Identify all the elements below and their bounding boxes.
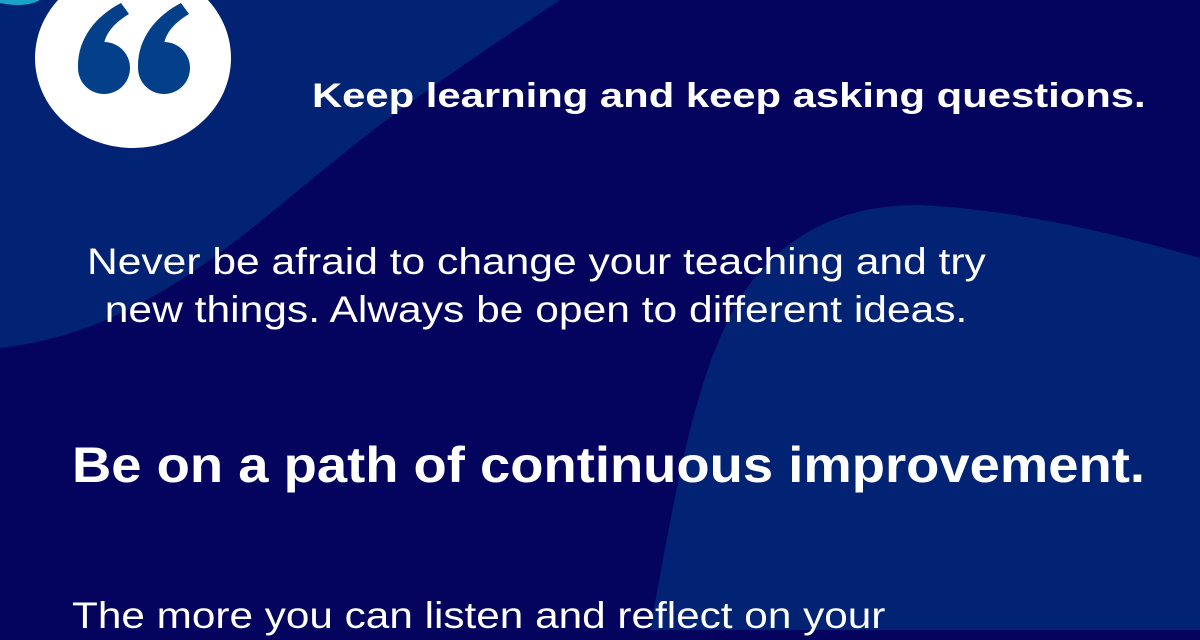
text block: never be afraid: new things. Always be open to different ideas. <box>105 289 967 330</box>
icon: quote marks <box>78 3 190 94</box>
text block: never be afraid <box>87 241 986 330</box>
text block: listen and reflect: The more you can listen and reflect on your <box>72 595 885 636</box>
icon: quote circle <box>35 0 231 148</box>
heading: continuous improvement: Be on a path of continuous improvement. <box>72 437 1145 493</box>
text block: never be afraid: Never be afraid to change your teaching and try <box>87 241 986 282</box>
heading: keep learning: Keep learning and keep asking questions. <box>312 77 1146 115</box>
